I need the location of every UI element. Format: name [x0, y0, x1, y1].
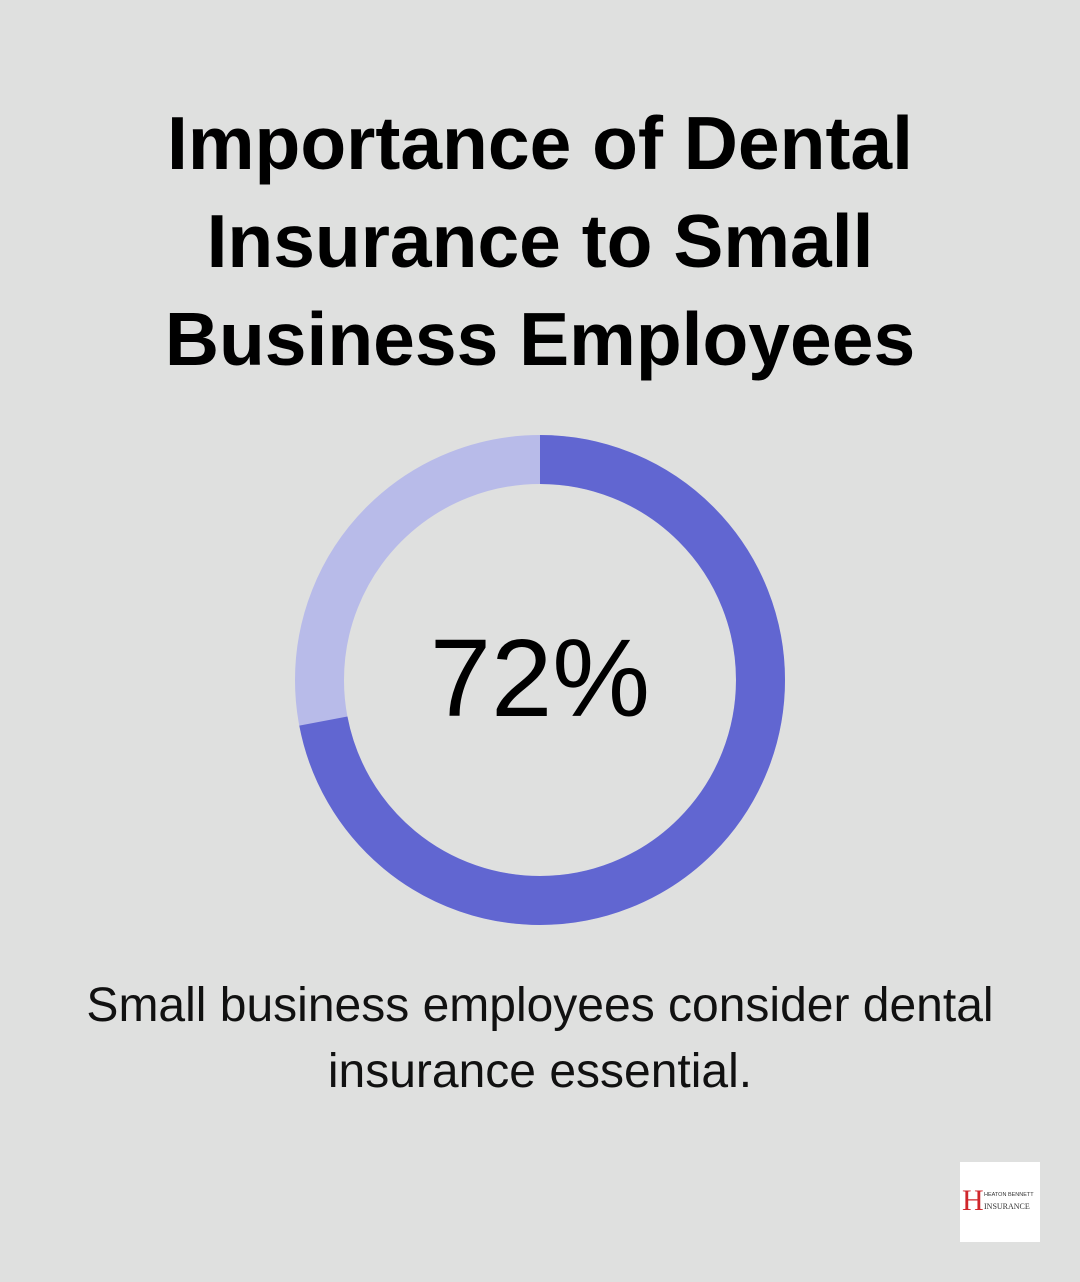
logo: H: [962, 1184, 984, 1217]
caption: insurance essential.: [328, 1045, 752, 1098]
title: [165, 101, 915, 381]
title: Insurance to Small: [207, 199, 873, 283]
title: Importance of Dental: [167, 101, 913, 185]
title: Business Employees: [165, 297, 915, 381]
logo: HEATON BENNETT: [984, 1192, 1034, 1198]
caption: Small business employees consider dental: [86, 979, 994, 1032]
logo: INSURANCE: [984, 1202, 1030, 1211]
logo: [960, 1162, 1040, 1242]
caption: [86, 979, 994, 1098]
donut chart: 72%: [430, 617, 650, 740]
